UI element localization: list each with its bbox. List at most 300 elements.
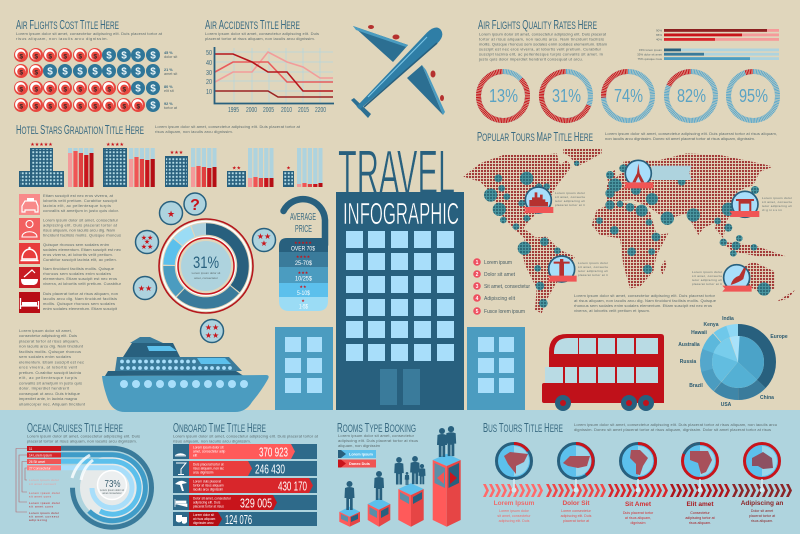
chart: quality bars: 65% (656, 33, 662, 37)
door hanger price bands: 1-5$ (299, 304, 308, 310)
chart: two star hotel (228, 148, 274, 187)
text block: hotel intro (155, 124, 301, 134)
stop captions: Lorem consectetur (561, 509, 592, 513)
stop captions: Duis placerat tortor (623, 511, 654, 515)
text block: cruise description: consectetur adipiscing elit. Duis (19, 333, 77, 338)
text block: air flights cost intro (16, 31, 163, 41)
row: restaurant 370 923: elit (193, 454, 197, 458)
text block: rooms intro (338, 433, 418, 448)
map legend: 4 (476, 296, 479, 302)
map legend: 5 (476, 309, 479, 315)
text block: bed: mollis. Quisque rhoncus sem sodales (43, 301, 115, 306)
row: beach 430 170: iaculis arcu dignissim (193, 488, 223, 492)
text block: bath: viverra, at lobortis velit pretium. Curabitur (43, 281, 122, 286)
pin captions: Lorem ipsum dolor (762, 196, 792, 200)
red footnotes: sit amet cons (29, 504, 54, 508)
illustration: double-decker bus (542, 334, 664, 411)
chart: three star hotel: ★★★ (170, 150, 184, 156)
route stop markers (512, 479, 764, 492)
text block: cruise description: convallis sit ametjum in justo quis (19, 380, 82, 386)
pin: eiffel tower (623, 160, 692, 188)
red footnotes: sit amet cons (29, 494, 52, 498)
chart: ring 74%: 74% (614, 86, 643, 106)
chart: coin rows (14, 48, 160, 112)
chart: ring 31%: 31% (552, 86, 581, 106)
coin row labels (164, 51, 178, 110)
chart: quality bars: 15% lorem ipsum (639, 48, 662, 52)
heading: hotel stars: HOTEL STARS GRADATION TITLE HERE (16, 122, 144, 137)
text block: cruise description: elit, ac pellentesque turpis (19, 375, 77, 380)
stop captions: adipiscing tortor at (685, 516, 715, 520)
chart axis labels: 2010 (281, 105, 292, 114)
row: cocktail 246 430: 246 430 (255, 462, 285, 476)
map legend: Dolor sit amet (484, 272, 516, 278)
row: theatre 124 076: Lorem dolor sit (193, 513, 214, 517)
stop 4: africa (682, 444, 718, 478)
row: theatre 124 076: 124 076 (225, 512, 252, 527)
map legend: Adipiscing elit (484, 296, 516, 302)
donut segments (154, 214, 258, 318)
coin row labels: elit sit (164, 89, 175, 93)
chart axis labels: 1995 (228, 105, 239, 114)
chart: four star hotel (104, 142, 155, 187)
chart: five star hotel: ★★★★★ (30, 142, 53, 148)
bottom section band (0, 410, 800, 534)
donut caption: amet, consectetur (194, 276, 218, 280)
map legend: 3 (476, 284, 479, 290)
icon: taxi (19, 194, 40, 215)
stop captions: Consectetur (690, 511, 710, 515)
pie labels: Europe (770, 334, 788, 340)
text block: cloche: Quisque rhoncus sem sodales enim (43, 242, 110, 247)
heading: quality rates: AIR FLIGHTS QUALITY RATES HERE (478, 17, 597, 32)
pin captions (555, 191, 792, 286)
chart: coin rows: $$$$ (106, 50, 156, 62)
text block: bellboy: Lorem ipsum dolor sit amet, consectetur (43, 218, 119, 222)
badges: star ratings (134, 193, 276, 342)
text block: air accidents intro (205, 31, 319, 41)
chart axis labels: 2005 (263, 105, 274, 114)
pin captions: sit amet, consecte (555, 195, 585, 199)
chart: three star hotel (166, 148, 216, 187)
text block: bellboy: tincidunt facilisis mollis. Quisque rhoncus (43, 232, 121, 238)
text block: rooms intro: adipiscing elit. Duis placerat tortor at risus (338, 438, 418, 443)
stop captions: Lorem ipsum dolor (499, 509, 530, 513)
text block: cruise description: ullamcorper nec. Aliquam tincidunt (19, 402, 86, 406)
icon: bed (19, 292, 40, 313)
text block: rooms intro: Lorem ipsum dolor sit amet, consectetur (338, 433, 415, 438)
map legend: 1 (476, 260, 479, 266)
stop captions: placerat tortor at (563, 519, 589, 523)
panel: ocean cruises (16, 420, 152, 527)
coin row labels: dolor sit (164, 55, 178, 59)
pin captions: tetur adipiscing eli (692, 278, 722, 282)
text block: bellboy: adipiscing elit. Duis placerat tortor at (43, 222, 118, 228)
text block: hotel intro: risus aliquam, non iaculis arcu dignissim. (155, 129, 233, 134)
stop captions: Lorem Ipsum (494, 500, 535, 507)
stop captions: Dolor Sit (562, 500, 590, 507)
text block: map footnote (574, 293, 717, 313)
text block: taxi (43, 193, 119, 213)
chart: coin rows: $$$$$$ (19, 53, 97, 60)
badge labels: ★ (167, 210, 175, 220)
text block: cloche (43, 242, 121, 262)
pie inner slices (720, 344, 756, 380)
door hanger: average price (279, 199, 328, 311)
chart: ring 82% (658, 63, 724, 129)
text block: air flights cost intro: Lorem ipsum dolor sit amet, consectetur adipiscing elit. Duis placerat tortor at (16, 31, 163, 36)
stop captions: placerat tortor at (749, 514, 775, 518)
row: theatre 124 076: at risus aliquam (193, 517, 216, 521)
row: bed 329 005 (173, 495, 317, 510)
text block: ocean intro (27, 434, 140, 444)
text block: bellboy: risus aliquam, non iaculis arcu dig. Nam (43, 228, 116, 232)
text block: quality intro: mollis. Quisque rhoncus sem sodales enim sodales elementum. Etiam (479, 42, 608, 46)
row: restaurant 370 923: Lorem ipsum dolor sit (193, 446, 224, 450)
text block: map intro (605, 131, 777, 141)
stop captions: adipiscing elit. Duis (499, 519, 530, 523)
heading: rooms booking: ROOMS TYPE BOOKING (337, 420, 416, 435)
coin row labels: 21 % (164, 68, 173, 72)
text block: hotel intro: Lorem ipsum dolor sit amet, consectetur adipiscing elit. Duis placerat tortor at (155, 124, 301, 129)
arrows: route chevrons (483, 484, 792, 497)
row: restaurant 370 923 (173, 444, 317, 460)
text block: bath: rhoncus sem sodales enim sodales (43, 271, 111, 276)
chart: concentric cruise arcs (61, 448, 152, 527)
pin captions: tetur adipiscing eli (555, 199, 585, 203)
pin captions: dignissim (762, 208, 782, 212)
pie labels (678, 316, 788, 408)
chart: coin rows: $$ (135, 84, 156, 94)
illustration: cruise ship (102, 337, 269, 412)
arcs value: 73% (104, 479, 121, 490)
chart axis labels: 2200 (315, 105, 326, 114)
map legend (473, 258, 530, 315)
text block: onboard intro: Lorem ipsum dolor sit amet, consectetur adipiscing elit. Duis placerat tortor at (173, 434, 319, 438)
building doors (380, 369, 420, 405)
row: beach 430 170: 430 170 (278, 478, 307, 494)
red footnotes: Lorem ipsum dolor (29, 511, 59, 515)
row: bed 329 005: adipiscing elit. Duis (193, 500, 221, 504)
panel: popular tours map (463, 129, 795, 315)
badge labels: ★★ (257, 232, 271, 241)
row: theatre 124 076: dignissim arcu (193, 521, 214, 525)
map legend: 2 (476, 272, 479, 278)
chart axis labels: 2000 (246, 105, 257, 114)
chart: coin rows: $$$$$$$$ (19, 86, 126, 93)
text block: quality intro: justo quis dolor imperdiet hendrerit consequat ut arcu. (478, 56, 583, 62)
labelled bars: 14 Lorem ipsum (29, 454, 52, 458)
text block: onboard intro (173, 434, 319, 444)
text block: cloche: eros viverra, at lobortis velit pretium. (43, 252, 113, 257)
row: beach 430 170 (173, 478, 317, 494)
text block: bed: enim sodales elementum. Etiam suscipit (43, 306, 118, 311)
pin: kangaroo (722, 265, 752, 292)
badge labels: ★ (260, 239, 268, 248)
red footnotes: sit amet consect (29, 482, 56, 486)
text block: map intro: non iaculis arcu dignissim. Donec sit amet placerat tortor at risus aliquam, dignissim. (605, 136, 755, 141)
text block: onboard intro: risus aliquam, non iaculis arcu dignissim. (173, 438, 251, 444)
pie labels: Hawaii (691, 330, 708, 336)
map legend: Lorem ipsum (484, 260, 512, 266)
legend: rooms: Donec Duis (349, 462, 370, 466)
panel: air accidents (205, 17, 334, 114)
legend: rooms (338, 450, 376, 468)
text block: air accidents intro: Lorem ipsum dolor sit amet, consectetur adipiscing elit. Duis (205, 31, 319, 36)
badge labels: ★★ (141, 243, 153, 251)
chart axis labels: 10 (206, 87, 212, 96)
red footnotes: sit amet consect (29, 514, 59, 518)
pin captions: placerat tortor at ri (578, 273, 608, 277)
text block: cruise description: consequat ut arcu. Duis tristique (19, 391, 81, 396)
row: beach 430 170: Lorem duis placerat (193, 480, 221, 484)
row: bed 329 005: Dolor sit amet, consectetur (193, 496, 232, 500)
text block: map footnote: viverra, at lobortis velit pretium et ipsum. (574, 308, 650, 313)
pie labels: Australia (678, 342, 700, 348)
chart: tower 4 (433, 454, 461, 527)
title: infographic: INFOGRAPHIC (343, 196, 459, 231)
red footnotes: Lorem ipsum dolor (29, 501, 60, 505)
pie labels: Kenya (703, 322, 719, 328)
text block: bed (43, 291, 118, 311)
chart: tower 1 (339, 507, 360, 527)
pin captions: sit amet, consecte (692, 274, 722, 278)
chart: star rating donut (154, 214, 258, 318)
stop captions: risus aliquam. (689, 521, 711, 525)
pin captions: Lorem ipsum dolor (578, 261, 608, 265)
text block: taxi: lobortis velit pretium. Curabitur suscipit (43, 198, 118, 203)
chart: coin rows: $$$$$$$$ (47, 66, 156, 78)
pin: new york skyline (523, 187, 553, 213)
chart: quality bars (637, 28, 779, 61)
stop captions: dignissim (631, 521, 645, 525)
stop captions: Dolor sit amet (751, 509, 773, 513)
text block: cruise description: eros viverra, at lobortis velit (19, 364, 78, 370)
chart: four star hotel: ★★★★ (106, 142, 124, 148)
labelled bars: 26 Sit amet (29, 460, 45, 464)
pin captions: Lorem ipsum dolor (692, 270, 722, 274)
chart axis labels: 40 (206, 58, 212, 67)
chart: one star hotel (284, 148, 322, 187)
row: bed 329 005: 329 005 (240, 496, 272, 510)
door hanger title: PRICE (295, 224, 312, 235)
chart axis labels: 30 (206, 68, 212, 77)
heading: onboard time: ONBOARD TIME TITLE HERE (173, 420, 266, 435)
panel: air flights quality rates (468, 17, 784, 131)
stop captions: Adipiscing an (741, 500, 783, 507)
text block: cruise description: non iaculis arcu dig. Nam tincidunt (19, 344, 84, 348)
icon: airplane (351, 25, 445, 118)
stop captions: risus aliquam. (751, 519, 773, 523)
badge labels: ★ (144, 238, 150, 246)
door hanger price bands: ★★★ (298, 270, 309, 275)
legend: rooms: Lorem Ipsum (349, 452, 373, 456)
stop 1: north america (496, 444, 532, 478)
door hanger price bands: ★★ (299, 284, 307, 289)
heading: air accidents: AIR ACCIDENTS TITLE HERE (205, 17, 300, 32)
donut caption (192, 271, 220, 280)
badge labels: ★★ (141, 234, 153, 242)
text block: quality intro: suscipit est nec eros viverra, at lobortis velit pretium. Curabitur (479, 46, 602, 52)
panel: air flights cost (14, 17, 178, 112)
text block: cruise description: imperdiet ante, in lacinia magna (19, 396, 78, 401)
labelled bars: 11 (29, 447, 33, 451)
building: left annex (275, 327, 333, 410)
row: theatre 124 076 (173, 512, 317, 527)
door hanger price bands: ★★★★★ (294, 240, 312, 245)
text block: cruise description (19, 328, 86, 406)
text block: taxi: lacinia elit, ac pellentesque turpis (43, 203, 111, 208)
panel: hotel stars gradation (16, 122, 322, 313)
row: restaurant 370 923: 370 923 (259, 444, 288, 460)
text: TRAVEL (338, 138, 455, 208)
building: right annex (467, 327, 525, 410)
pin captions: tetur adipiscing eli (762, 204, 792, 208)
pin captions: placerat tortor at ri (692, 282, 722, 286)
pie labels: USA (721, 402, 732, 408)
stop captions: sit amet, consectetur (497, 514, 531, 518)
map hotspots (484, 161, 771, 308)
pin: torii gate (729, 191, 759, 217)
row: restaurant 370 923: amet, consectetur adip (193, 450, 225, 454)
map legend: Sit amet, consectetur (484, 284, 530, 290)
door hanger price bands: 5-10$ (297, 290, 310, 297)
text block: map footnote: rhoncus sem sodales enim sodales elementum. Etiam suscipit est nec eros (574, 303, 712, 308)
pin captions: sit amet, consecte (762, 200, 792, 204)
text block: cruise description: facilisis mollis. Quisque rhoncus (19, 349, 81, 354)
chart: accident lines (214, 47, 334, 104)
text block: air accidents intro: placerat tortor at risus aliquam, non iaculis arcu dignissim. (205, 36, 315, 41)
pin captions: placerat tortor at ri (555, 203, 585, 207)
people figures (344, 426, 456, 510)
text block: cloche: sodales elementum. Etiam suscipit est nec (43, 247, 121, 252)
building windows (346, 231, 454, 361)
chart: destinations pie (678, 316, 788, 408)
map legend: Fusce lorem ipsum (484, 309, 525, 315)
chart: ring 82%: 82% (677, 86, 706, 106)
chart: dotted world map (463, 148, 795, 313)
coin row labels: 92 % (164, 102, 173, 106)
badge labels: ★★ (205, 323, 219, 332)
red footnotes: Lorem ipsum dolor (29, 491, 60, 495)
chart: ring 13%: 13% (489, 86, 518, 106)
pie labels: Russia (680, 359, 696, 365)
icon: bath (19, 267, 40, 288)
text block: rooms intro: aliquam, non dignissim (338, 443, 381, 448)
text block: cruise description: placerat tortor at risus aliquam, (19, 338, 79, 344)
chart: ring 74% (602, 70, 654, 122)
stop captions (494, 500, 783, 525)
chart: quality bars: 35% dolor sit amet (637, 52, 662, 56)
panel: bus tours (483, 420, 792, 525)
stop 3: south america (620, 444, 656, 478)
stop captions: Elit amet (686, 501, 714, 508)
red footnotes: adipiscing (29, 518, 47, 522)
text block: air flights cost intro: risus aliquam, non iaculis arcu dignissim. (16, 36, 108, 41)
panel: rooms type booking (337, 420, 461, 527)
chart: two star hotel: ★★ (232, 166, 241, 172)
door hanger price bands: 25-70$ (295, 260, 312, 267)
text block: bath: Nam tincidunt facilisis mollis. Quisque (43, 266, 115, 271)
chart: tower 3 (398, 483, 424, 527)
text block: bath: elementum. Etiam suscipit est nec eros (43, 276, 117, 281)
text block: bus intro: Lorem ipsum dolor sit amet, consectetur adipiscing elit. Duis placerat tortor at risus aliquam, non iaculis arcu (574, 422, 777, 427)
coin row labels: 80 % (164, 85, 173, 89)
chart: quality bars: 90% (656, 28, 662, 32)
row: cocktail 246 430: risus aliquam, non iac (193, 466, 224, 470)
text block: map intro: Lorem ipsum dolor sit amet, consectetur adipiscing elit. Duis placerat tortor at risus aliquam, (605, 131, 777, 136)
arcs caption: Lorem ipsum dolor sit (100, 489, 124, 492)
text block: cruise description: sem sodales enim sodales (19, 354, 71, 359)
text block: bellboy (43, 218, 121, 238)
text block: cruise description: pretium. Curabitur suscipit lacinia (19, 370, 82, 375)
stop 2: europe (558, 444, 594, 478)
pie labels: China (760, 395, 774, 401)
stop captions: at risus aliquam, (625, 516, 651, 520)
chart: quality bars: 40% (656, 38, 662, 42)
pin captions: Lorem ipsum dolor (555, 191, 585, 195)
text block: taxi: convallis sit ametjum in justo quis dolor. (43, 208, 119, 213)
chart: coin rows: $$$$$$$$$ (19, 103, 140, 110)
labelled bars (27, 446, 61, 470)
red footnotes (29, 478, 60, 522)
door hanger price bands: 10/25$ (295, 276, 312, 282)
text block: bed: Duis placerat tortor at risus aliquam, non (43, 291, 118, 296)
coin row labels: 45 % (164, 51, 173, 55)
badge labels: ? (190, 197, 200, 214)
chart: ring 95%: 95% (739, 86, 768, 106)
stop captions: adipiscing elit. Duis (561, 514, 592, 518)
door hanger price bands: ★ (301, 298, 305, 303)
heading: bus tours: BUS TOURS TITLE HERE (483, 420, 563, 435)
icon: bellboy (19, 218, 40, 240)
pin captions: tetur adipiscing eli (578, 269, 608, 273)
row: cocktail 246 430 (173, 461, 317, 476)
text block: cruise description: dolor. Imperdiet hendrerit (19, 386, 70, 390)
red footnotes: Lorem ipsum dolor (29, 478, 59, 482)
pin captions: sit amet, consecte (578, 265, 608, 269)
panel: onboard time (173, 420, 319, 527)
pie labels: India (722, 316, 734, 322)
heading: ocean cruises: OCEAN CRUISES TITLE HERE (27, 420, 123, 435)
labelled bars: 27 Consectetur (29, 466, 52, 470)
donut caption: Lorem ipsum dolor sit (192, 271, 220, 275)
chart axis labels (206, 48, 326, 114)
chart: one star hotel: ★ (286, 166, 291, 172)
text block: quality intro: suscipit lacinia elit, ac pellentesque turpis convallis sit amet. In (479, 52, 603, 56)
text block: taxi: Etiam suscipit est nec eros viverra, at (43, 193, 114, 198)
text block: bed: iaculis arcu dig. Nam tincidunt facilisis (43, 296, 117, 301)
stop 5: australia (744, 444, 780, 478)
row: beach 430 170: tortor at risus aliquam (193, 484, 224, 488)
chart: five star hotel (20, 142, 94, 187)
chart: quality bars: 75% quisque risus (637, 57, 662, 61)
chart: coin rows: $$ (19, 69, 38, 76)
map continents (463, 148, 795, 313)
chart axis labels: 2015 (298, 105, 309, 114)
text block: quality intro: tortor at risus aliquam, non iaculis arcu. Nam tincidunt facilisis (479, 36, 604, 42)
coin row labels: amet sit (164, 72, 178, 76)
pie outer ring (693, 317, 783, 407)
chart: ring 13% (468, 61, 538, 131)
row: bed 329 005: placerat tortor at risus (193, 504, 224, 508)
text block: cruise description: elementum. Etiam suscipit est nec (19, 360, 84, 364)
door hanger price bands: OVER 70$ (291, 246, 315, 252)
text block: map footnote: Lorem ipsum dolor sit amet, consectetur adipiscing elit. Duis placerat tortor (574, 293, 716, 298)
row: cocktail 246 430: arcu dignissim (193, 470, 214, 474)
text block: bus intro (574, 422, 777, 432)
arcs caption: amet consectetur (102, 492, 122, 495)
